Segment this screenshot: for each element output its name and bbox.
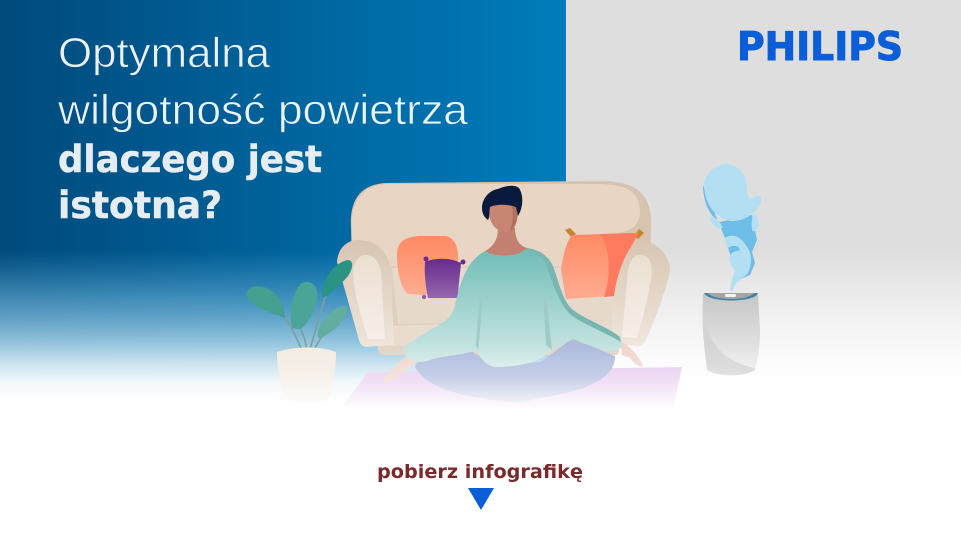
legs xyxy=(415,338,615,403)
hands xyxy=(383,341,643,382)
title xyxy=(57,29,469,227)
title line: wilgotność powietrza: wilgotność powietrza xyxy=(57,86,469,133)
grey background fade xyxy=(566,250,961,410)
title line: istotna?: istotna? xyxy=(58,184,222,227)
illustration: air humidifier xyxy=(702,293,760,375)
hair xyxy=(482,186,522,220)
neck and head xyxy=(485,228,527,256)
logo: Philips: PHILIPS xyxy=(737,25,903,70)
illustration: purple pillow xyxy=(422,256,466,299)
icon: download arrow xyxy=(468,488,494,510)
illustration: right orange pillow xyxy=(561,228,644,299)
panel: blue background xyxy=(0,0,566,420)
panel: grey background xyxy=(566,0,961,420)
call to action text: pobierz infografikę xyxy=(377,461,583,483)
illustration: rug xyxy=(340,367,682,410)
title line: dlaczego jest: dlaczego jest xyxy=(58,138,322,181)
title line: Optymalna: Optymalna xyxy=(58,29,271,76)
white fade over the lower illustration xyxy=(0,345,961,410)
illustration: left orange pillow xyxy=(397,236,458,295)
illustration: potted plant xyxy=(246,260,352,403)
sweater xyxy=(403,248,622,367)
blue background fade xyxy=(0,250,566,410)
illustration: sofa xyxy=(337,181,670,355)
illustration: steam cloud xyxy=(703,164,761,292)
illustration: person xyxy=(383,186,643,403)
